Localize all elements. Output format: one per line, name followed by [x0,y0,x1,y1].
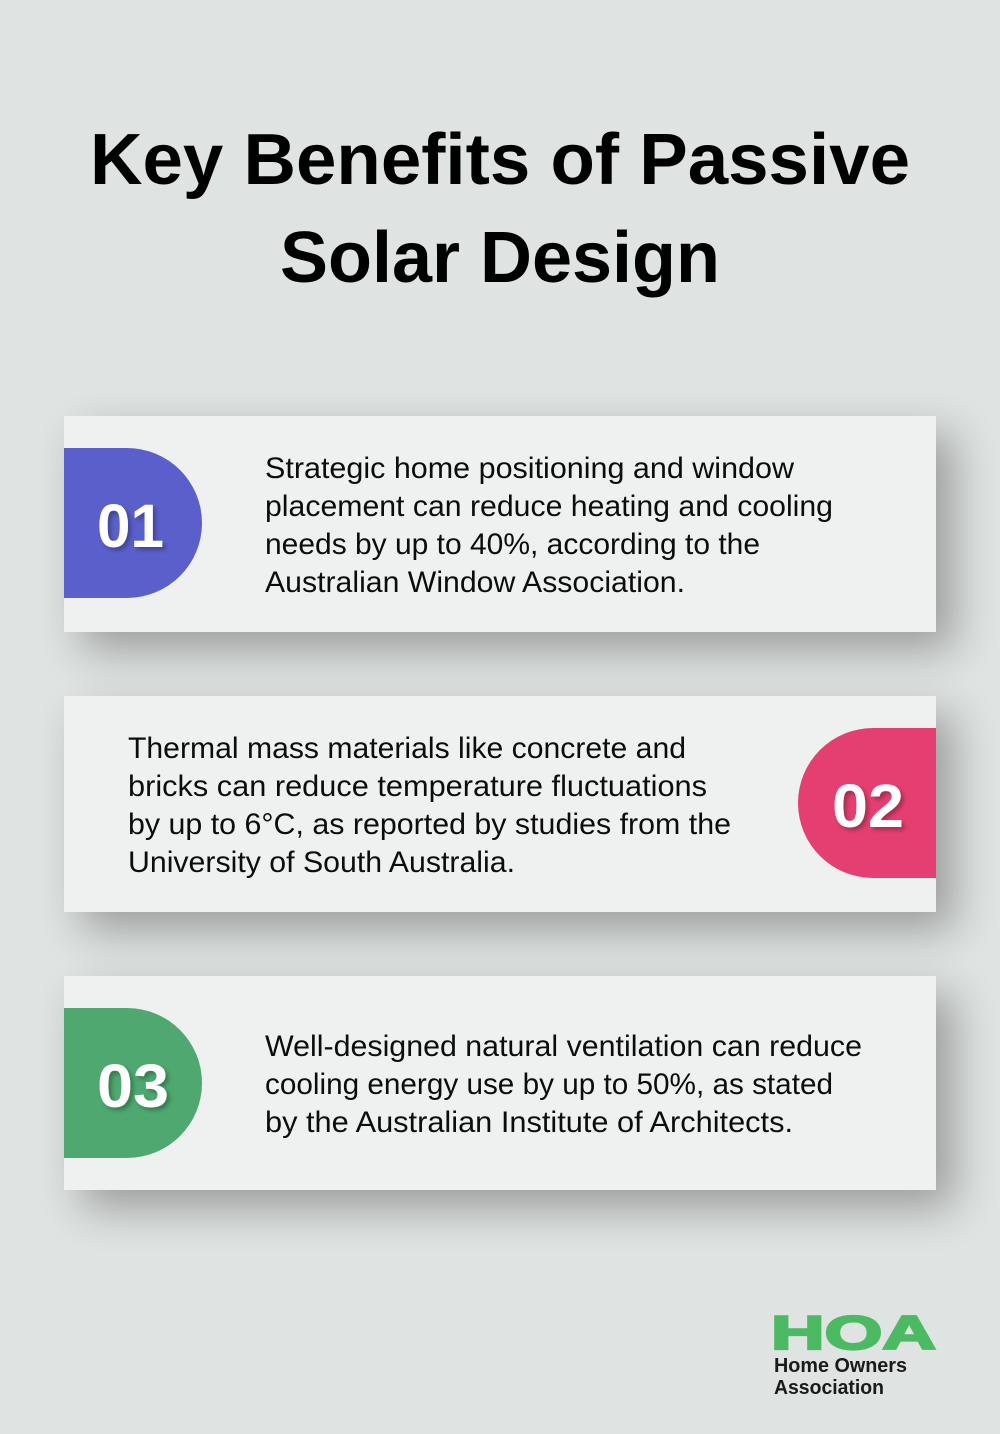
text block: benefit 02 description: by up to 6°C, as reported by studies from the [128,808,731,841]
badge: number 02 [798,728,936,878]
badge: number 02: 02 [832,772,904,840]
text block: benefit 01 description: placement can reduce heating and cooling [265,490,833,523]
badge: number 01: 01 [97,492,164,560]
badge: number 03: 03 [97,1052,169,1120]
text block: benefit 02 description [128,732,731,879]
text block: benefit 03 description: cooling energy use by up to 50%, as stated [265,1068,833,1101]
text block: benefit 01 description: needs by up to 40%, according to the [265,528,760,561]
text block: benefit 02 description: Thermal mass materials like concrete and [128,732,686,765]
text block: benefit 01 description: Strategic home positioning and window [265,452,794,485]
title: Solar Design [280,218,720,298]
text block: benefit 03 description [265,1030,862,1139]
text block: benefit 01 description [265,452,833,599]
panel: benefit 02 [64,696,954,930]
panel: benefit 03 [64,976,954,1208]
logo: Home Owners Association: Association [774,1377,884,1399]
text block: benefit 03 description: by the Australian Institute of Architects. [265,1106,793,1139]
panel: benefit 01 [64,416,954,650]
badge: number 03 [64,1008,202,1158]
logo: Home Owners Association [771,1306,936,1399]
text block: benefit 02 description: bricks can reduce temperature fluctuations [128,770,707,803]
logo: Home Owners Association: HOA [771,1306,936,1359]
title [90,120,910,298]
logo: Home Owners Association: Home Owners [774,1355,907,1377]
text block: benefit 03 description: Well-designed natural ventilation can reduce [265,1030,862,1063]
text block: benefit 01 description: Australian Window Association. [265,566,685,599]
badge: number 01 [64,448,202,598]
title: Key Benefits of Passive [90,120,910,200]
text block: benefit 02 description: University of South Australia. [128,846,515,879]
